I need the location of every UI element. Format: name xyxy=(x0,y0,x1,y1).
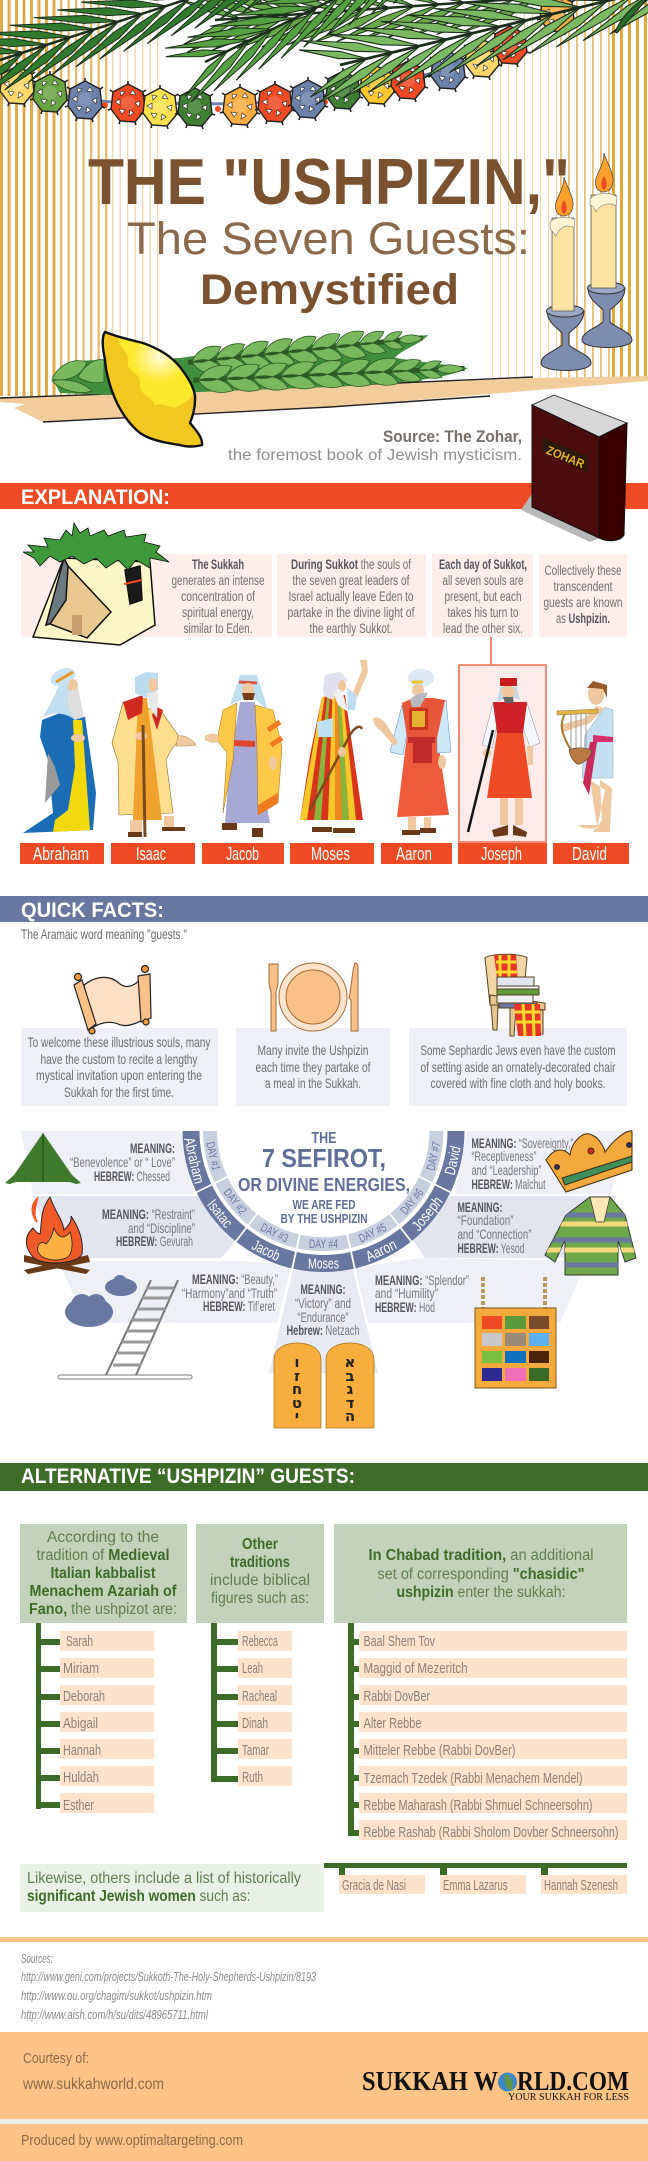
panel: Chabad tradition heading: In Chabad tradition, an additional xyxy=(368,1547,594,1564)
list: chasidic ushpizin: Rabbi DovBer xyxy=(364,1688,430,1705)
list: ushpizot women: Esther xyxy=(63,1797,94,1814)
list: chasidic ushpizin: Alter Rebbe xyxy=(364,1715,422,1732)
explanation section bar xyxy=(0,483,648,509)
explanation text panels: as Ushpizin. xyxy=(556,610,610,626)
meaning: Aaron: MEANING: “Splendor” xyxy=(375,1272,469,1288)
quick fact panels: Sukkah for the first time. xyxy=(64,1084,174,1100)
list: biblical figures: Dinah xyxy=(242,1715,268,1732)
meaning: Jacob: HEBREW: Tif’eret xyxy=(203,1298,275,1314)
header background: gold sukkah stripes xyxy=(0,190,648,198)
title: THE "USHPIZIN," xyxy=(88,145,570,218)
explanation text panels: During Sukkot the souls of xyxy=(291,556,411,572)
meaning: Jacob xyxy=(182,1271,278,1314)
explanation text panels: the earthly Sukkot. xyxy=(310,620,392,636)
footer: courtesy panel xyxy=(0,2032,648,2119)
figure: David xyxy=(557,681,613,832)
sefirot semicircle: DAY #6 xyxy=(397,1186,427,1217)
sefirot semicircle xyxy=(180,1131,465,1274)
meaning: Isaac: and “Discipline” xyxy=(128,1220,195,1236)
icon: tent xyxy=(5,1133,81,1184)
meaning: Moses: Hebrew: Netzach xyxy=(286,1322,360,1338)
meaning: Moses: “Victory” and xyxy=(295,1295,351,1311)
sefirot rays: meaning panels xyxy=(21,1131,627,1373)
explanation text panels xyxy=(21,554,627,637)
quick fact panels: To welcome these illustrious souls, many xyxy=(28,1034,210,1050)
list: biblical figures: Ruth xyxy=(242,1769,263,1786)
connector line to Joseph xyxy=(490,637,492,665)
explanation text panels: the seven great leaders of xyxy=(292,572,410,588)
guest name tags: Isaac xyxy=(136,844,166,864)
panel: Chabad tradition heading: set of corresponding "chasidic" xyxy=(378,1566,584,1583)
meaning: Moses: MEANING: xyxy=(300,1281,346,1297)
meaning: Moses xyxy=(286,1281,360,1338)
icon: clouds xyxy=(65,1275,137,1327)
icon: candles xyxy=(541,153,632,370)
footer: produced by xyxy=(0,2124,648,2161)
list: chasidic ushpizin: Maggid of Mezeritch xyxy=(364,1660,468,1677)
list: biblical figures xyxy=(211,1623,292,1786)
list: biblical figures: Leah xyxy=(242,1660,263,1677)
quick fact panels: mystical invitation upon entering the xyxy=(36,1067,202,1083)
meaning: Isaac: MEANING: “Restraint” xyxy=(102,1206,195,1222)
icon: Zohar book xyxy=(521,395,627,542)
logo: Sukkah World: YOUR SUKKAH FOR LESS xyxy=(508,2091,629,2103)
highlighted Joseph panel xyxy=(459,665,546,842)
sefirot semicircle: Aaron xyxy=(363,1236,399,1265)
quick fact panels: have the custom to recite a lengthy xyxy=(40,1051,198,1067)
guest name tags: Moses xyxy=(311,844,350,864)
list: significant women: Emma Lazarus xyxy=(443,1877,508,1894)
list: chasidic ushpizin xyxy=(348,1623,627,1841)
explanation text panels: spiritual energy, xyxy=(182,604,254,620)
meaning: Jacob: “Harmony”and “Truth” xyxy=(182,1285,277,1301)
sources: http://www.ou.org/chagim/sukkot/ushpizin.htm xyxy=(21,1988,212,2003)
panel: Chabad tradition heading: ushpizin enter the sukkah: xyxy=(396,1584,566,1601)
panel: Fano tradition heading xyxy=(20,1524,187,1623)
sources xyxy=(21,1951,317,2022)
icon: striped sweater xyxy=(540,1197,640,1275)
quick fact panels: Many invite the Ushpizin xyxy=(258,1042,368,1058)
sefirot heading: 7 SEFIROT, xyxy=(262,1143,386,1173)
list: significant women: Gracia de Nasi xyxy=(342,1877,406,1894)
icon: table plank xyxy=(0,376,648,422)
meaning: David xyxy=(472,1135,574,1192)
sefirot semicircle: Isatac xyxy=(203,1196,236,1232)
guest name tags: Jacob xyxy=(226,844,259,864)
panel: other traditions heading: traditions xyxy=(230,1554,290,1571)
icon: ten commandment tablets: ד xyxy=(346,1394,355,1412)
meaning: Joseph xyxy=(458,1199,532,1256)
sefirot heading: THE xyxy=(312,1130,337,1147)
sefirot semicircle: DAY #4 xyxy=(309,1237,338,1251)
quick facts section bar xyxy=(0,896,648,922)
sefirot semicircle: Jacob xyxy=(249,1237,283,1265)
panel: historically significant women: Likewise, others include a list of historically xyxy=(27,1870,301,1887)
list: ushpizot women: Hannah xyxy=(63,1742,101,1759)
list: ushpizot women: Abigail xyxy=(63,1715,98,1732)
sefirot semicircle: DAY #2 xyxy=(221,1186,250,1217)
panel: other traditions heading: include biblical xyxy=(210,1572,310,1589)
footer: courtesy panel: Courtesy of: xyxy=(23,2051,89,2067)
icon: ladder xyxy=(58,1280,192,1379)
panel: historically significant women xyxy=(20,1864,324,1912)
panel: Fano tradition heading: tradition of Medieval xyxy=(36,1547,170,1564)
title: The Seven Guests: xyxy=(127,213,530,264)
meaning: Moses: “Endurance” xyxy=(298,1309,349,1325)
explanation text panels: Each day of Sukkot, xyxy=(439,556,527,572)
guest name tags: Joseph xyxy=(481,844,522,864)
icon: scroll xyxy=(74,966,151,1034)
icon: breastplate xyxy=(475,1277,556,1388)
icon: lulav and myrtle branches xyxy=(52,324,468,395)
meaning: Abraham: HEBREW: Chessed xyxy=(94,1168,170,1184)
explanation text panels: Israel actually leave Eden to xyxy=(288,588,414,604)
list: biblical figures: Racheal xyxy=(242,1688,277,1705)
icon: chair with books xyxy=(485,954,545,1036)
title: Demystified xyxy=(200,266,459,314)
figure: Aaron xyxy=(373,669,451,835)
sefirot semicircle: DAY #5 xyxy=(356,1220,389,1245)
sefirot heading: BY THE USHPIZIN xyxy=(280,1211,368,1226)
explanation text panels: partake in the divine light of xyxy=(288,604,415,620)
explanation text panels: concentration of xyxy=(181,588,255,604)
sources: Sources: xyxy=(21,1951,53,1966)
icon: ten commandment tablets: ה xyxy=(345,1407,355,1425)
meaning: Abraham: “Benevolence” or “ Love” xyxy=(70,1154,175,1170)
panel: Fano tradition heading: Menachem Azariah of xyxy=(30,1583,177,1600)
explanation text panels: similar to Eden. xyxy=(184,620,252,636)
icon: ten commandment tablets: ז xyxy=(294,1367,300,1385)
sefirot heading: WE ARE FED xyxy=(292,1197,356,1212)
figure: Moses xyxy=(300,660,368,833)
sefirot semicircle: Joseph xyxy=(409,1193,446,1234)
guest name tags: Abraham xyxy=(33,844,89,864)
sefirot semicircle: David xyxy=(442,1145,465,1177)
explanation text panels: transcendent xyxy=(554,578,613,594)
icon: plate and cutlery xyxy=(269,963,358,1031)
quick fact panels xyxy=(21,1028,627,1106)
panel: other traditions heading: figures such as: xyxy=(211,1590,309,1607)
alternative guests section bar xyxy=(0,1463,648,1491)
meaning: Joseph: “Foundation” xyxy=(458,1212,514,1228)
icon: ten commandment tablets: ח xyxy=(292,1380,302,1398)
explanation text panels: all seven souls are xyxy=(442,572,524,588)
sources: http://www.aish.com/h/su/dits/48965711.html xyxy=(21,2007,209,2022)
alternative guests section bar: ALTERNATIVE “USHPIZIN” GUESTS: xyxy=(21,1465,355,1488)
aramaic word note: The Aramaic word meaning "guests." xyxy=(21,926,187,942)
panel: other traditions heading xyxy=(196,1524,324,1623)
meaning: Jacob: MEANING: “Beauty,” xyxy=(192,1271,278,1287)
icon: ten commandment tablets: ג xyxy=(347,1380,354,1398)
explanation text panels: generates an intense xyxy=(172,572,265,588)
figure: Abraham xyxy=(23,665,96,833)
panel: historically significant women: significant Jewish women such as: xyxy=(27,1888,250,1905)
icon: ten commandment tablets: ו xyxy=(294,1353,300,1371)
icon: etrog xyxy=(102,330,204,448)
meaning: Aaron: and “Humility” xyxy=(375,1285,438,1301)
palm fronds xyxy=(0,0,648,106)
meaning: David: HEBREW: Malchut xyxy=(472,1176,546,1192)
sefirot semicircle: DAY #1 xyxy=(203,1140,223,1172)
quick fact panels: each time they partake of xyxy=(256,1059,371,1075)
list: chasidic ushpizin: Mitteler Rebbe (Rabbi DovBer) xyxy=(364,1742,516,1759)
logo: Sukkah World: RLD.COM xyxy=(517,2066,629,2096)
list: ushpizot women: Deborah xyxy=(63,1688,105,1705)
meaning: Isaac xyxy=(102,1206,195,1249)
explanation section bar: EXPLANATION: xyxy=(21,486,170,509)
meaning: Joseph: MEANING: xyxy=(458,1199,502,1215)
meaning: Abraham xyxy=(70,1140,175,1184)
sources: http://www.geni.com/projects/Sukkoth-The-Holy-Shepherds-Ushpizin/8193 xyxy=(21,1969,317,1984)
meaning: Joseph: and “Connection” xyxy=(458,1226,532,1242)
panel: Chabad tradition heading xyxy=(334,1524,627,1623)
meaning: David: and “Leadership” xyxy=(472,1162,542,1178)
meaning: David: MEANING: “Sovereignty,” xyxy=(472,1135,574,1151)
source line: Source: The Zohar, xyxy=(383,427,522,446)
figure: Jacob xyxy=(205,675,282,837)
figure: Isaac xyxy=(112,672,196,837)
meaning: David: “Receptiveness” xyxy=(472,1148,537,1164)
list: ushpizot women xyxy=(36,1623,154,1814)
explanation text panels: takes his turn to xyxy=(448,604,519,620)
sefirot heading xyxy=(238,1130,410,1226)
meaning: Abraham: MEANING: xyxy=(130,1140,175,1156)
icon: ten commandment tablets: י xyxy=(295,1407,299,1425)
explanation text panels: present, but each xyxy=(444,588,522,604)
paper chain garland xyxy=(0,0,577,129)
sefirot heading: OR DIVINE ENERGIES, xyxy=(238,1175,410,1195)
panel: Fano tradition heading: Italian kabbalist xyxy=(50,1565,156,1582)
logo: Sukkah World: SUKKAH W xyxy=(362,2066,498,2096)
guest name tags: Aaron xyxy=(396,844,432,864)
icon: ten commandment tablets xyxy=(274,1343,374,1428)
list: biblical figures: Tamar xyxy=(242,1742,269,1759)
sefirot semicircle: DAY #7 xyxy=(424,1140,444,1172)
meaning: Isaac: HEBREW: Gevurah xyxy=(116,1233,193,1249)
meaning: Joseph: HEBREW: Yesod xyxy=(458,1240,524,1256)
title xyxy=(88,145,570,314)
list: ushpizot women: Huldah xyxy=(63,1769,99,1786)
icon: sukkah xyxy=(23,523,169,645)
guest name tags xyxy=(20,843,629,864)
icon: ten commandment tablets: ט xyxy=(292,1394,302,1412)
list: biblical figures: Rebecca xyxy=(242,1633,278,1650)
list: significant women xyxy=(324,1863,627,1894)
meaning: Aaron xyxy=(375,1272,469,1315)
source line: the foremost book of Jewish mysticism. xyxy=(228,447,522,464)
explanation text panels: The Sukkah xyxy=(192,556,244,572)
sefirot semicircle: DAY #3 xyxy=(258,1220,291,1245)
meaning: Aaron: HEBREW: Hod xyxy=(375,1299,435,1315)
icon: ten commandment tablets: א xyxy=(345,1353,355,1371)
logo: Sukkah World xyxy=(362,2066,629,2103)
footer: courtesy panel: www.sukkahworld.com xyxy=(22,2076,164,2093)
icon: crown xyxy=(546,1131,632,1192)
quick facts section bar: QUICK FACTS: xyxy=(21,899,164,922)
list: ushpizot women: Miriam xyxy=(63,1660,99,1677)
source line xyxy=(228,427,522,464)
panel: Fano tradition heading: According to the xyxy=(47,1529,159,1546)
icon: fire xyxy=(24,1197,90,1274)
sefirot semicircle: Abraham xyxy=(180,1136,207,1185)
figure: Joseph xyxy=(468,678,540,837)
sefirot semicircle: Moses xyxy=(308,1256,339,1272)
footer: produced by: Produced by www.optimaltargeting.com xyxy=(21,2133,243,2149)
icon: Zohar book: ZOHAR xyxy=(544,443,587,471)
quick fact panels: a meal in the Sukkah. xyxy=(265,1075,361,1091)
explanation text panels: lead the other six. xyxy=(443,620,523,636)
list: chasidic ushpizin: Baal Shem Tov xyxy=(364,1633,435,1650)
panel: Fano tradition heading: Fano, the ushpizot are: xyxy=(29,1601,177,1618)
guest name tags: David xyxy=(572,844,607,864)
icon: ten commandment tablets: ב xyxy=(345,1367,355,1385)
panel: other traditions heading: Other xyxy=(242,1536,278,1553)
list: ushpizot women: Sarah xyxy=(66,1633,93,1650)
